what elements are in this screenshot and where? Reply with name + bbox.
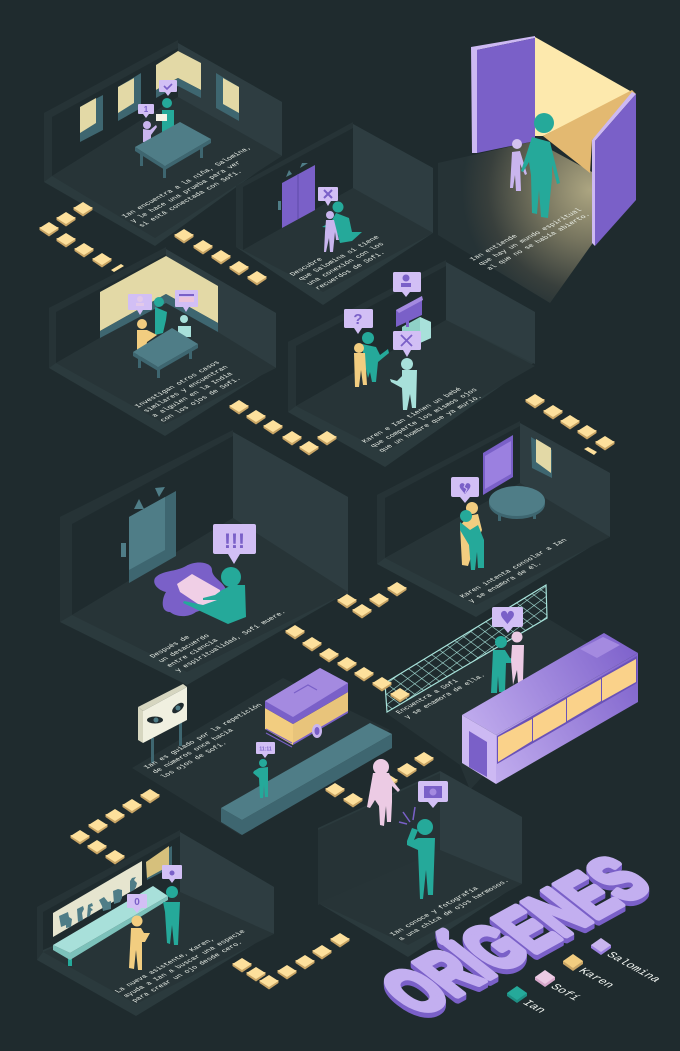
text: Karen intenta consolar a Ian — [459, 538, 570, 599]
bubble: heart — [492, 607, 523, 633]
bubble: idea — [162, 865, 182, 883]
table — [135, 122, 211, 178]
bubble: person — [393, 272, 421, 297]
window — [100, 256, 218, 338]
text: a alguien en la India — [150, 371, 236, 419]
figure: Ian — [521, 113, 560, 218]
monitor — [396, 296, 423, 327]
wall panel — [53, 861, 142, 937]
figure: Salomina — [510, 139, 527, 191]
figure: Salomina — [324, 211, 339, 252]
figure: Ian with camera — [407, 819, 435, 899]
figure: Karen — [137, 319, 157, 352]
panel: Karen e Ian — [288, 260, 535, 467]
text: Ian conoce y fotografía — [389, 886, 482, 937]
text: al que no se había abierto. — [485, 212, 593, 272]
elevator — [278, 163, 315, 228]
bubble: question: ? — [353, 311, 363, 328]
bubble: person — [128, 294, 152, 315]
panel: Karen intenta — [377, 421, 610, 617]
orange floor — [543, 90, 636, 173]
paper — [156, 114, 167, 121]
legend: Salomina — [591, 938, 664, 984]
panel: La nueva asistente — [37, 830, 274, 1016]
text: que hay un mundo espiritual — [477, 208, 585, 267]
figure: Ian — [162, 98, 174, 132]
table — [133, 328, 198, 378]
text: y se enamora de ella. — [403, 673, 488, 720]
text: similares y encuentran — [142, 365, 231, 414]
crib — [402, 317, 431, 343]
text: que comparte los mismos ojos — [369, 387, 480, 449]
figure: Ian — [154, 297, 167, 335]
figure: Ian — [183, 567, 246, 624]
panel: Ian es guiado — [132, 668, 392, 835]
text: Encuentra a Sofí — [395, 679, 461, 715]
figure: Salomina — [143, 121, 157, 142]
text: para crear un ojo desde cero. — [130, 940, 245, 1004]
panel: Ian conoce — [318, 771, 522, 957]
figure: Ian — [253, 759, 268, 798]
poster — [531, 437, 552, 478]
legend: Karen: Karen — [575, 966, 618, 990]
figure: Ian kneeling — [322, 202, 362, 243]
legend: Ian: Ian — [519, 998, 549, 1015]
bubble: exclamation — [213, 524, 256, 564]
panel: Descubre — [236, 122, 433, 305]
back wall — [535, 37, 632, 136]
bubble: 11:11: 11:11 — [259, 746, 272, 752]
bubble: 0 — [127, 894, 147, 913]
bubble: 1: 1 — [144, 105, 149, 114]
bubble: card — [175, 290, 198, 312]
billboard — [138, 684, 187, 763]
bubble: 11:11 — [256, 742, 275, 758]
bubble: camera — [418, 781, 448, 808]
figure: Karen — [129, 916, 150, 970]
legend — [507, 938, 664, 1015]
text: Después de — [149, 635, 193, 659]
text: recuerdos de Sofí. — [314, 250, 388, 291]
panel: Después — [60, 430, 348, 685]
text: ayuda a Ian a buscar una especie — [122, 929, 248, 999]
eyes — [147, 701, 186, 724]
elevator — [121, 487, 176, 583]
right door — [592, 92, 636, 246]
text: que un hombre que ya murió. — [377, 394, 485, 454]
panel: Investigan — [49, 247, 276, 436]
windows — [80, 51, 239, 142]
puddle — [154, 563, 226, 616]
text: una conexión con los — [305, 242, 387, 287]
text: La nueva asistente, Karen, — [114, 937, 217, 994]
legend: Ian — [507, 986, 549, 1015]
round table — [489, 486, 545, 521]
text: que Salomina sí tiene — [297, 235, 382, 282]
figure: Ian — [460, 510, 484, 570]
text: Investigan otros casos — [134, 360, 223, 409]
legend: Karen — [563, 954, 618, 990]
figure: Ian — [491, 636, 518, 693]
bubble: 0: 0 — [134, 897, 140, 908]
figure: Karen — [354, 343, 367, 387]
bubble: broken heart — [451, 477, 479, 503]
text: Ian encuentra a la niña, Salomina, — [121, 145, 254, 219]
bubble: question — [344, 309, 373, 334]
legend: Salomina: Salomina — [603, 950, 664, 984]
text: y le hace una prueba para ver — [129, 160, 244, 224]
bubble: exclamation: !!! — [224, 530, 245, 553]
body — [177, 574, 222, 610]
panel: Ian encuentra a Salomina — [44, 40, 282, 246]
figure: Sofí — [511, 632, 524, 685]
purple panel — [483, 435, 513, 495]
figure: Ian — [362, 332, 389, 382]
camera flash — [399, 807, 415, 824]
text: a una chica de ojos hermosos. — [397, 878, 512, 942]
figure: Sofí sitting — [367, 759, 400, 826]
small window — [146, 846, 172, 880]
text: Descubre — [289, 257, 325, 277]
figure: Karen — [460, 502, 482, 566]
panel: Ian entiende — [438, 36, 636, 303]
left door — [471, 36, 535, 153]
bubble: broken heart: ♥ — [458, 480, 472, 498]
train — [462, 633, 638, 784]
text: Ian es guiado por la repetición — [143, 703, 265, 770]
glowing floor — [438, 141, 592, 303]
bubble: X — [393, 331, 421, 357]
counter — [53, 886, 168, 966]
tile paths — [40, 202, 614, 990]
truck — [265, 668, 348, 747]
text: si está conectada con Sofí. — [137, 169, 245, 229]
text: Karen e Ian tienen un bebé — [361, 387, 464, 444]
platform — [221, 723, 392, 835]
legend: Sofí: Sofí — [547, 982, 584, 1003]
bubble: X — [318, 187, 338, 206]
text: y se enamora de él. — [467, 561, 545, 604]
bubble: heart: ♥ — [499, 608, 516, 629]
bubble: check — [159, 80, 177, 96]
figure: aqua man — [390, 358, 417, 410]
text: y espiritualidad, Sofí muere. — [174, 610, 289, 673]
figure: Ian — [163, 886, 180, 945]
text: los ojos de Sofí. — [159, 741, 230, 780]
text: de números once hacia — [151, 728, 237, 775]
legend: Sofí — [535, 970, 584, 1003]
fence — [385, 585, 547, 712]
text: Ian entiende — [469, 234, 520, 262]
figure: aqua man — [178, 315, 191, 337]
bubble: 1 — [138, 104, 154, 118]
panel: Encuentra a Sofí — [385, 585, 638, 790]
text: un desacuerdo — [157, 633, 212, 664]
text: con los ojos de Sofí. — [159, 376, 244, 423]
text: entre ciencia — [165, 638, 221, 669]
